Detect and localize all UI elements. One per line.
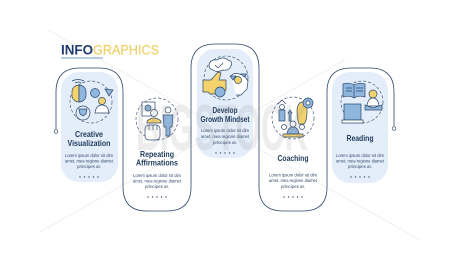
- snake outline connector: [56, 44, 394, 211]
- body text: Lorem ipsum dolor sit dim: [269, 172, 317, 178]
- pagination dots: [350, 176, 370, 178]
- body text: Lorem ipsum dolor sit dim: [133, 173, 181, 178]
- heading: Creative: [75, 130, 103, 139]
- body text: principes at.: [281, 184, 305, 189]
- body text: [336, 153, 385, 169]
- body text: Lorem ipsum dolor sit dim: [201, 128, 249, 133]
- title: INFO: [61, 42, 93, 58]
- body text: [201, 128, 250, 145]
- body text: principes at.: [77, 164, 101, 169]
- panel: Creative Visualization: [61, 72, 118, 182]
- body text: principes at.: [145, 184, 169, 189]
- pagination dots: [283, 196, 303, 198]
- pagination dots: [215, 152, 235, 154]
- panel: Develop Growth Mindset: [197, 49, 253, 158]
- body text: [133, 173, 182, 189]
- icon: coach and group: [272, 97, 314, 139]
- pagination dots: [147, 196, 167, 198]
- body text: amet, mea regione diamet: [133, 178, 182, 184]
- body text: [269, 172, 318, 189]
- title: GRAPHICS: [93, 42, 159, 58]
- body text: amet, mea regione diamet: [269, 178, 318, 183]
- icon: brain and target: [70, 80, 113, 123]
- icon: book, laptop and reader: [341, 81, 383, 123]
- panel: Repeating Affirmations: [133, 98, 182, 198]
- body text: [65, 153, 114, 169]
- body text: amet, mea regione diamet: [201, 134, 250, 139]
- title: [61, 42, 159, 58]
- connector end circles: [54, 127, 396, 133]
- heading: Reading: [346, 134, 374, 143]
- panel: Coaching: [269, 97, 318, 198]
- panel: Reading: [332, 72, 388, 183]
- heading: Repeating: [140, 150, 174, 159]
- heading: Develop: [212, 106, 238, 115]
- body text: Lorem ipsum dolor sit dim: [336, 153, 384, 158]
- body text: principes at.: [213, 140, 237, 145]
- pagination dots: [79, 176, 99, 178]
- panel: Repeating Affirmations: Affirmations: [136, 158, 178, 168]
- panel: Creative Visualization: Visualization: [68, 139, 111, 148]
- heading: Coaching: [278, 154, 309, 163]
- body text: Lorem ipsum dolor sit dim: [65, 153, 113, 158]
- panel: Develop Growth Mindset: Growth Mindset: [200, 115, 250, 124]
- body text: amet, mea regione diamet: [336, 158, 385, 164]
- body text: principes at.: [348, 164, 372, 169]
- icon: fist and presenter: [136, 98, 178, 140]
- icon: thumb up and gear: [203, 56, 248, 100]
- body text: amet, mea regione diamet: [65, 158, 114, 164]
